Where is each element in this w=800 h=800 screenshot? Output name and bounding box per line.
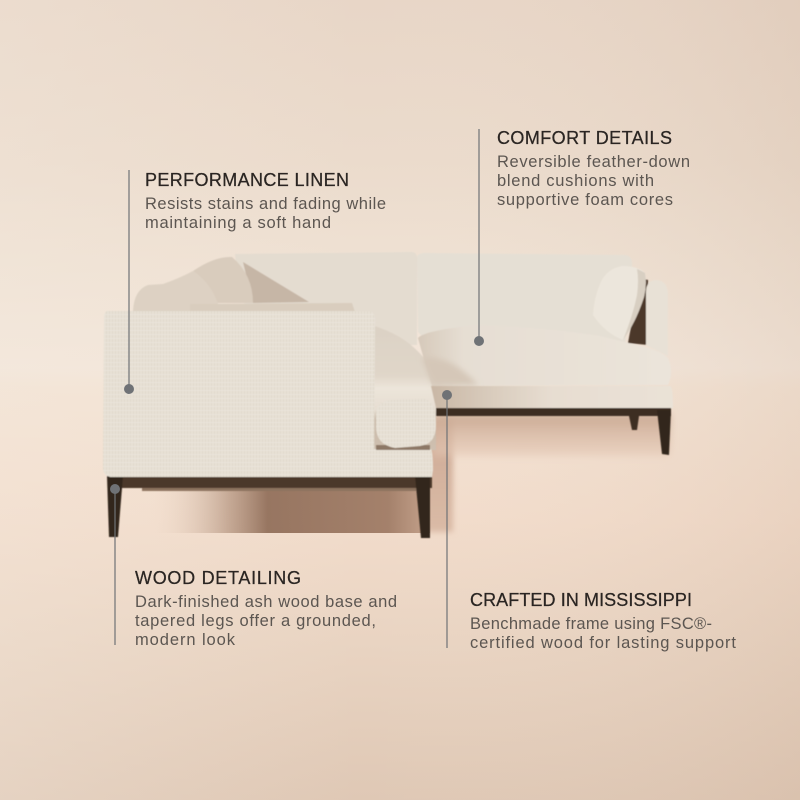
body text [497, 153, 690, 209]
left wood rail [108, 477, 432, 488]
body text: supportive foam cores [497, 191, 673, 209]
body text: Resists stains and fading while [145, 195, 386, 213]
body text: blend cushions with [497, 172, 654, 190]
heading: WOOD DETAILING [135, 568, 301, 588]
right throw pillow [593, 266, 646, 340]
dark gap right [628, 278, 648, 345]
side arm panel [103, 311, 375, 477]
body text: Benchmade frame using FSC®- [470, 615, 712, 633]
shadow on far back cushion [243, 262, 309, 303]
right wood rail [436, 408, 671, 416]
body text: modern look [135, 631, 236, 649]
callout: performance linen [124, 170, 386, 394]
body text: Reversible feather-down [497, 153, 690, 171]
callout: comfort details [474, 128, 690, 346]
body text [135, 593, 397, 649]
marker dot [442, 390, 452, 400]
right back cushion [417, 253, 632, 345]
right back leg [629, 416, 639, 430]
leader line [446, 395, 448, 648]
right leg of left section [415, 476, 430, 538]
right front leg [657, 410, 671, 455]
leader line [114, 489, 116, 645]
body text [145, 195, 386, 232]
marker dot [474, 336, 484, 346]
pillow shaded edge [623, 269, 646, 340]
sofa illustration [103, 252, 673, 538]
callout: wood detailing [110, 484, 397, 649]
left front leg [107, 476, 123, 537]
long thin pillow behind arm [190, 303, 355, 312]
body text: certified wood for lasting support [470, 634, 736, 652]
right arm [646, 280, 668, 356]
front seat cushion end [376, 399, 436, 448]
seat shadow [422, 358, 478, 385]
heading: COMFORT DETAILS [497, 128, 672, 148]
marker dot [124, 384, 134, 394]
heading: CRAFTED IN MISSISSIPPI [470, 590, 692, 610]
far back cushion [235, 252, 417, 345]
gap under cushion [376, 445, 430, 450]
body text [470, 615, 736, 652]
side back cushions receding [193, 257, 253, 303]
body text: Dark-finished ash wood base and [135, 593, 397, 611]
marker dot [110, 484, 120, 494]
floor shadow under sofa [150, 414, 670, 533]
body text: maintaining a soft hand [145, 214, 331, 232]
sofa upholstery and frame [103, 252, 673, 538]
right seat cushion [418, 325, 671, 386]
heading: PERFORMANCE LINEN [145, 170, 349, 190]
callout: crafted in mississippi [442, 390, 736, 652]
body text: tapered legs offer a grounded, [135, 612, 376, 630]
leader line [128, 170, 130, 389]
front base panel [374, 449, 433, 477]
left seat run [374, 326, 436, 450]
right base rail [431, 386, 673, 408]
leader line [478, 129, 480, 341]
